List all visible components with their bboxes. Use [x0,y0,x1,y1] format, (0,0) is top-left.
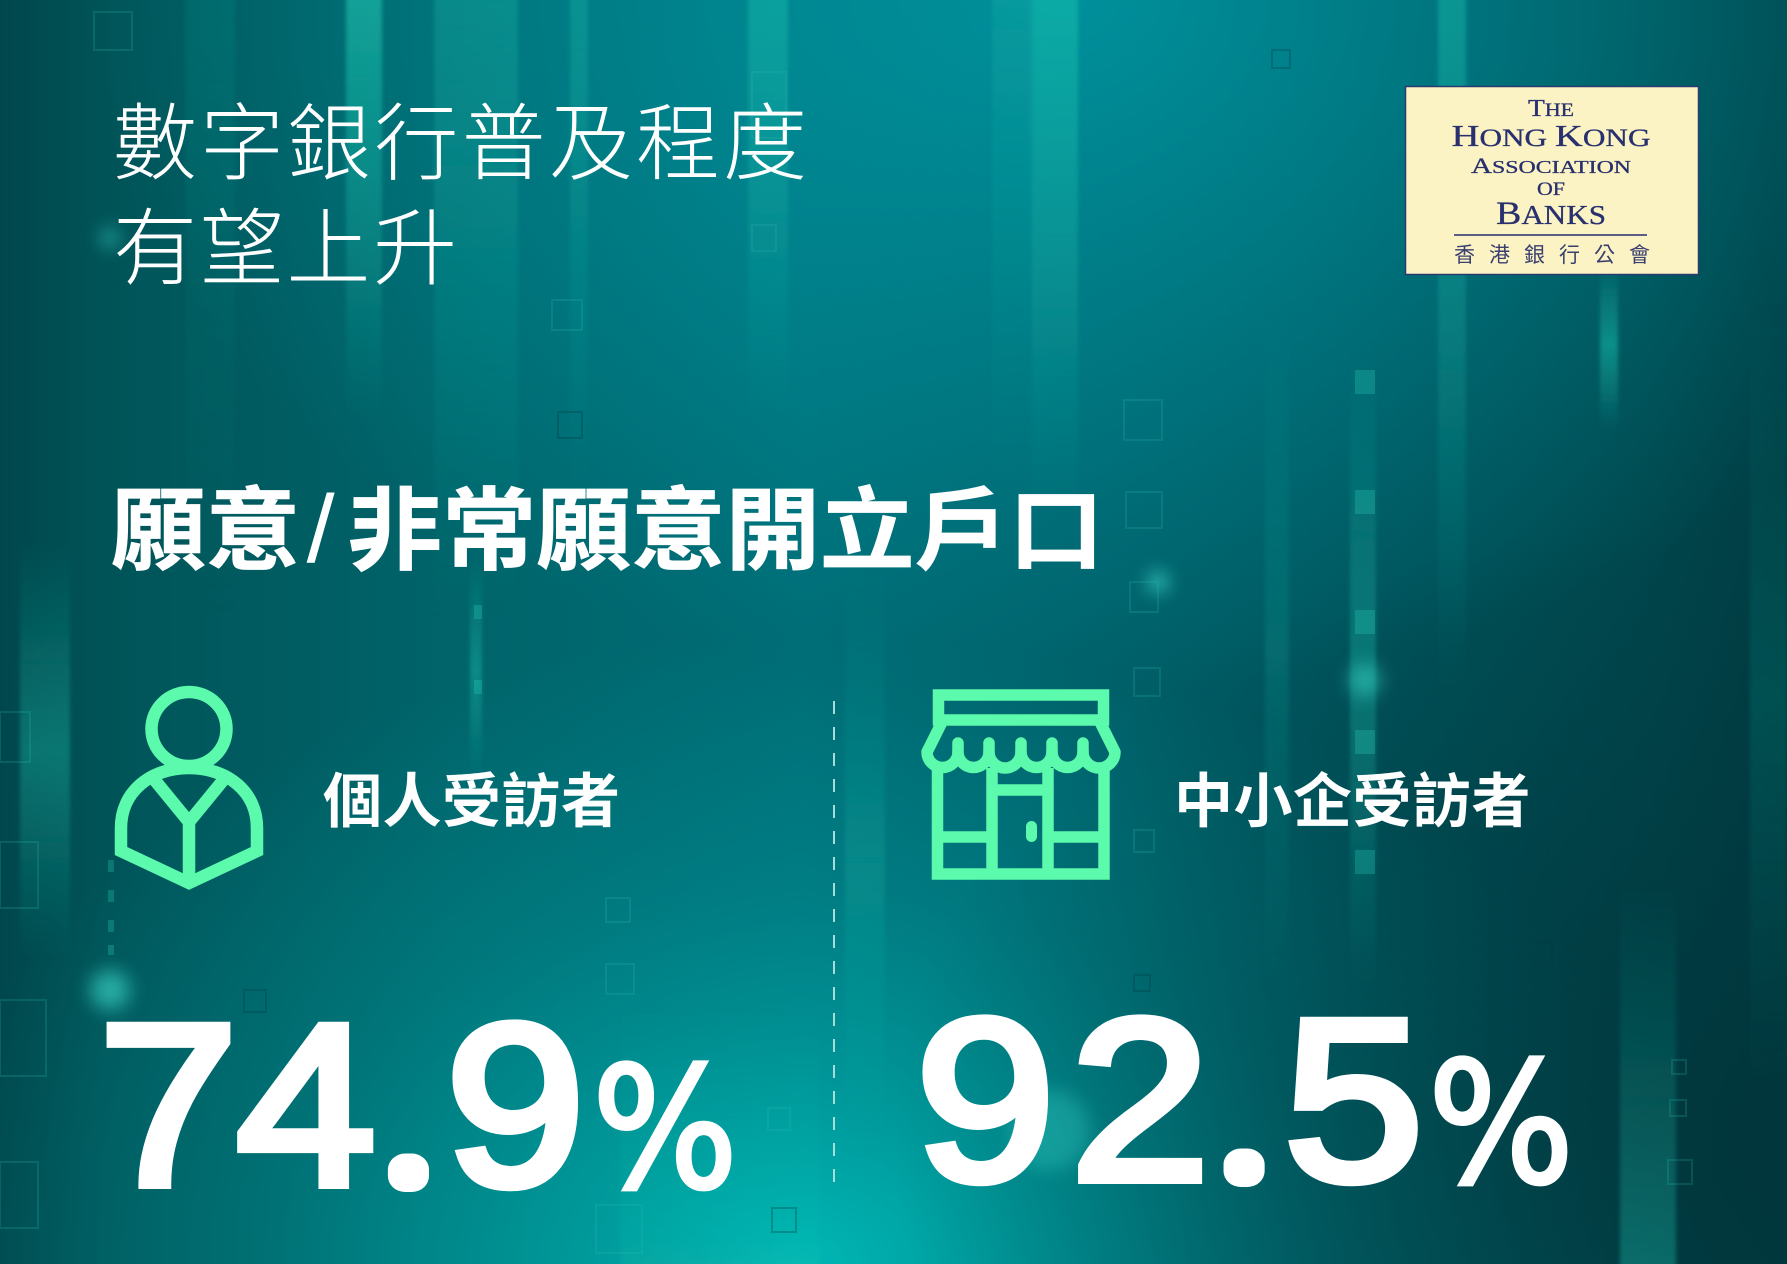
number: SME 92.5%: 2 [1070,971,1210,1228]
logo: The Hong Kong Association of Banks: OF [1537,179,1565,200]
heading: 願意 [111,480,300,582]
title [113,97,807,296]
logo: The Hong Kong Association of Banks: A SSOCIATION [1471,153,1631,178]
number: SME 92.5%: 9 [916,971,1055,1228]
logo: The Hong Kong Association of Banks: 香港銀行公會 [1454,244,1650,267]
number: individual 74.9%: 7 [99,976,238,1233]
number: individual 74.9%: % [592,1031,738,1227]
logo: The Hong Kong Association of Banks: HONG KONG [1452,118,1650,153]
icon: shop [927,695,1115,874]
number: individual 74.9% [99,976,738,1233]
heading: / [307,475,335,582]
icon: person [121,692,257,884]
label: individual respondents: 個人受訪者 [323,769,621,835]
label: SME respondents: 中小企受訪者 [1174,769,1531,835]
number: SME 92.5%: . [1235,1117,1253,1184]
title: 數字銀行普及程度 [113,97,807,191]
title: 有望上升 [113,202,457,296]
heading: 非常願意開立戶口 [348,480,1103,582]
logo: The Hong Kong Association of Banks [1406,86,1698,274]
number: individual 74.9%: 4 [236,976,376,1233]
divider [833,701,835,1188]
logo: The Hong Kong Association of Banks: THE [1528,96,1574,122]
number: SME 92.5%: 5 [1284,971,1423,1228]
number: individual 74.9%: 9 [446,976,585,1233]
number: SME 92.5%: % [1428,1026,1574,1222]
number: SME 92.5% [916,971,1574,1228]
number: individual 74.9%: . [399,1122,418,1189]
logo: The Hong Kong Association of Banks: BANKS [1496,196,1606,232]
